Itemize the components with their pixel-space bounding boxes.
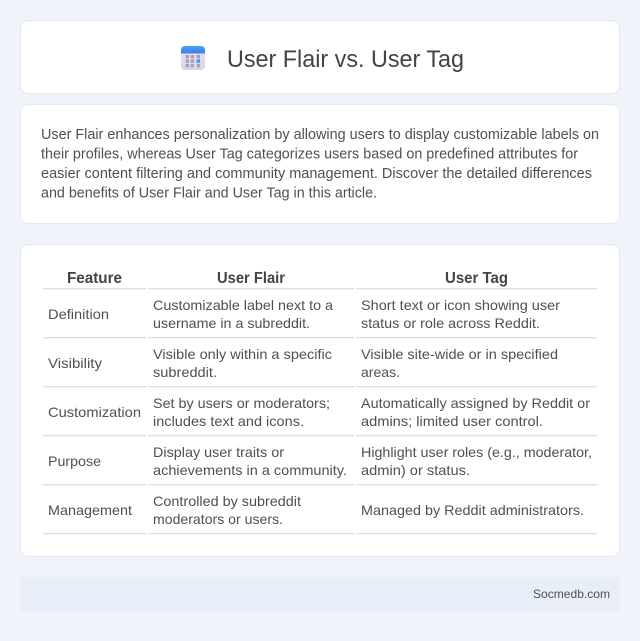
row: visibility: Visibility [48, 355, 102, 371]
row: visibility: Visible site-wide or in specified [361, 346, 558, 362]
row: management: moderators or users. [153, 511, 283, 527]
table header: User Flair [217, 270, 285, 287]
intro paragraph: their profiles, whereas User Tag categorizes users based on predefined attributes for [41, 146, 578, 162]
row: visibility: areas. [361, 364, 400, 380]
table header: User Tag [445, 270, 508, 287]
intro paragraph [41, 127, 599, 202]
row: definition: Definition [48, 306, 109, 322]
row: purpose: achievements in a community. [153, 462, 347, 478]
panel: comparison table [20, 244, 620, 556]
row: definition [48, 297, 560, 331]
row: purpose [48, 444, 592, 478]
footer source text: Socmedb.com [533, 587, 610, 601]
row: definition: Customizable label next to a [153, 297, 333, 313]
row: customization: Customization [48, 404, 141, 420]
row: customization: Automatically assigned by Reddit or [361, 395, 590, 411]
row: management: Controlled by subreddit [153, 493, 301, 509]
row: visibility [48, 346, 558, 380]
panel: introduction [20, 104, 620, 224]
table header: Feature [67, 270, 122, 287]
table header [67, 270, 508, 287]
row: purpose: Highlight user roles (e.g., moderator, [361, 444, 592, 460]
row: customization: Set by users or moderators; [153, 395, 330, 411]
intro paragraph: easier content filtering and community management. Discover the detailed differences [41, 166, 592, 182]
icon: calendar [181, 46, 205, 70]
footer [20, 577, 620, 611]
row: customization [48, 395, 590, 429]
row: management: Management [48, 502, 132, 518]
row: purpose: Display user traits or [153, 444, 284, 460]
row: customization: includes text and icons. [153, 413, 304, 429]
title card [20, 20, 620, 94]
row: definition: status or role across Reddit. [361, 315, 540, 331]
row: definition: username in a subreddit. [153, 315, 310, 331]
intro paragraph: User Flair enhances personalization by allowing users to display customizable labels on [41, 127, 599, 143]
row: definition: Short text or icon showing user [361, 297, 560, 313]
row: purpose: admin) or status. [361, 462, 470, 478]
row: purpose: Purpose [48, 453, 101, 469]
row: visibility: subreddit. [153, 364, 217, 380]
intro paragraph: and benefits of User Flair and User Tag in this article. [41, 186, 377, 202]
row: visibility: Visible only within a specific [153, 346, 332, 362]
row: management [48, 493, 584, 527]
row: customization: admins; limited user control. [361, 413, 543, 429]
title: User Flair vs. User Tag [227, 46, 464, 73]
row: management: Managed by Reddit administrators. [361, 502, 584, 518]
